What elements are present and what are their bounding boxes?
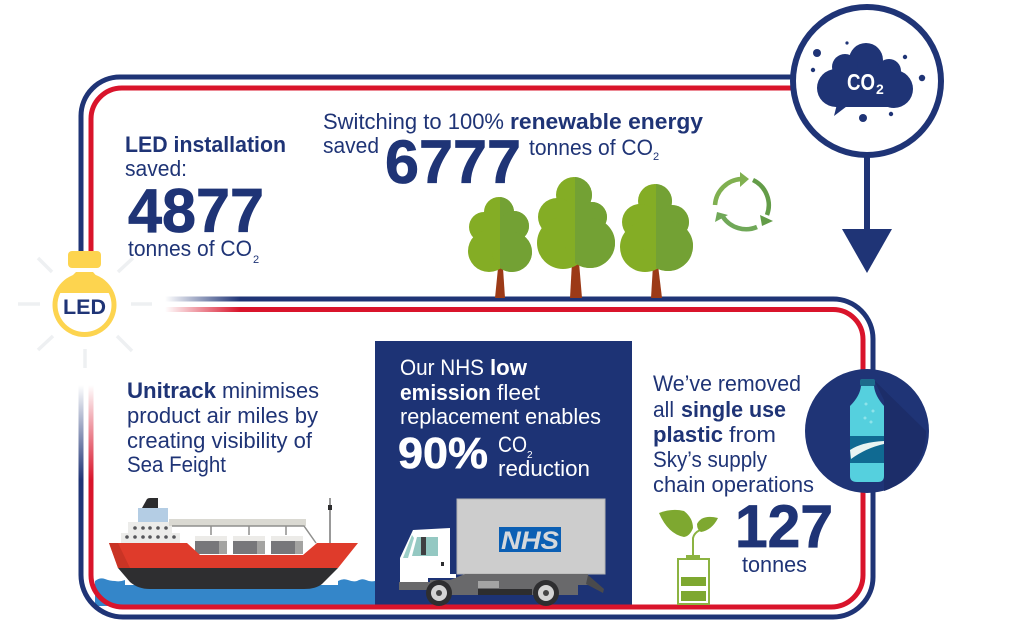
wheels — [426, 580, 559, 606]
icon: LED light bulb: LED — [63, 296, 106, 319]
text: single use plastic: single use — [681, 397, 786, 422]
bottom connector lines — [81, 299, 873, 617]
text: single use plastic: plastic — [653, 422, 723, 447]
text: NHS low emission fleet: reduction — [498, 456, 590, 481]
text: NHS low emission fleet: Our NHS — [400, 355, 484, 380]
text: single use plastic: Sky’s supply — [653, 447, 767, 472]
text: NHS low emission fleet: CO — [498, 432, 527, 457]
icon: plastic bottle circle — [805, 369, 929, 493]
text: renewable energy: renewable energy — [510, 109, 704, 134]
text: LED installation: tonnes of CO — [128, 236, 252, 261]
text: NHS low emission fleet — [398, 355, 601, 481]
text: NHS low emission fleet: 90% — [398, 429, 488, 478]
icon: LED light bulb — [18, 251, 152, 368]
icon: CO2 cloud circle with arrow — [793, 7, 941, 273]
text: NHS low emission fleet: emission — [400, 380, 491, 405]
arrow — [842, 155, 892, 273]
icon: NHS truck: NHS — [501, 527, 559, 555]
top connector lines — [81, 77, 800, 256]
text: LED installation: LED installation — [125, 132, 286, 157]
icon: three trees — [468, 177, 693, 298]
text: NHS low emission fleet: replacement enables — [400, 404, 601, 429]
text: single use plastic: We’ve removed — [653, 371, 801, 396]
icon: CO2 cloud circle with arrow: 2 — [876, 81, 884, 97]
text: NHS low emission fleet: fleet — [497, 380, 540, 405]
icon: NHS truck — [399, 499, 605, 606]
text: 127 tonnes: tonnes — [742, 552, 807, 577]
text: NHS low emission fleet: low — [490, 355, 528, 380]
text: single use plastic: from — [729, 422, 776, 447]
tree 2 — [537, 177, 615, 298]
text: LED installation: 2 — [253, 254, 259, 266]
text: LED installation — [125, 132, 286, 266]
icon: plant battery — [659, 510, 718, 604]
text: NHS low emission fleet: 2 — [527, 450, 533, 461]
text: renewable energy: Switching to 100% — [323, 109, 504, 134]
icon: recycle arrows — [715, 172, 773, 229]
text: Unitrack: minimises — [222, 378, 319, 403]
text: Unitrack: Unitrack — [127, 378, 217, 403]
text: LED installation: 4877 — [128, 177, 264, 246]
text: 127 tonnes: 127 — [735, 493, 833, 560]
icon: ship — [109, 498, 358, 589]
sea water — [95, 578, 375, 606]
text: LED installation: saved: — [125, 156, 187, 181]
icon: CO2 cloud circle with arrow: CO — [847, 69, 875, 95]
tree 1 — [468, 197, 532, 298]
text: Unitrack: creating visibility of — [127, 428, 313, 453]
text: Unitrack: product air miles by — [127, 403, 318, 428]
tree 3 — [620, 184, 693, 298]
text: single use plastic: chain operations — [653, 472, 814, 497]
text: renewable energy — [323, 109, 704, 196]
text: Unitrack: Sea Feight — [127, 452, 226, 477]
text: Unitrack — [127, 378, 319, 477]
text: single use plastic: all — [653, 397, 674, 422]
text: renewable energy: 6777 — [385, 128, 521, 196]
text: renewable energy: 2 — [653, 151, 659, 163]
cloud — [811, 41, 925, 122]
blue fleet panel — [375, 341, 632, 606]
text: renewable energy: saved — [323, 133, 379, 158]
text: renewable energy: tonnes of CO — [529, 135, 653, 160]
text: single use plastic — [653, 371, 814, 497]
